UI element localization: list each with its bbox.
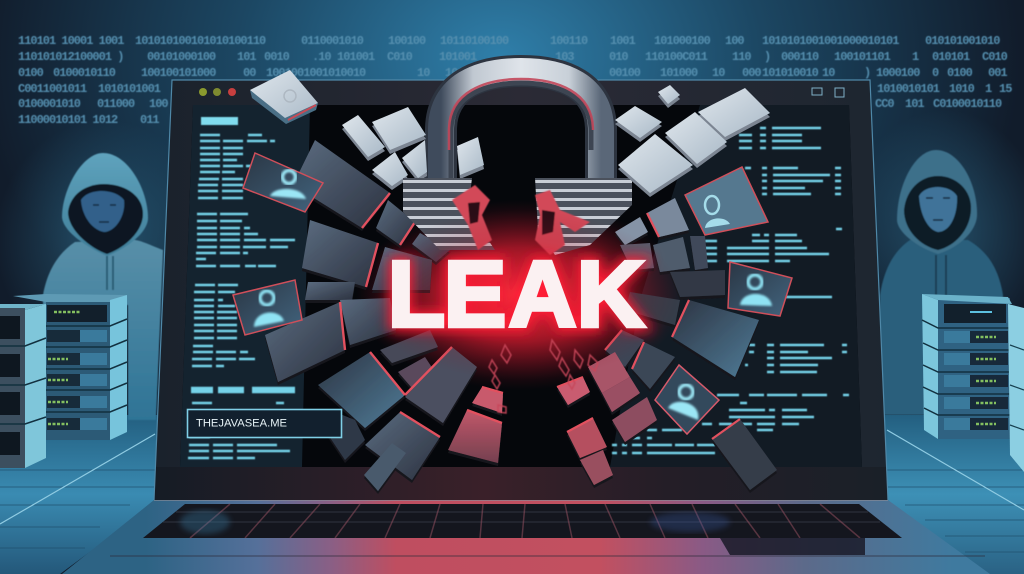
binary code wall: 100 (149, 97, 168, 111)
binary code wall: 101001 (439, 50, 477, 64)
binary code wall: 101 (445, 66, 464, 80)
binary code wall: 10 (417, 66, 430, 80)
fragments left (233, 70, 503, 491)
server rack right (922, 294, 1024, 472)
binary code wall: ) (764, 50, 770, 64)
binary code wall: ) (864, 66, 870, 80)
right code panel (610, 105, 862, 467)
binary code wall: 100 (725, 34, 744, 48)
binary code wall: 10 (822, 66, 835, 80)
binary code wall (18, 34, 1012, 127)
binary code wall: 00 (243, 66, 256, 80)
binary code wall: 101 (237, 50, 256, 64)
binary code wall: 101 (905, 97, 924, 111)
laptop (62, 80, 990, 574)
binary code wall: 100110 (550, 34, 588, 48)
red glow (355, 200, 685, 390)
binary code wall: 0100 (18, 66, 44, 80)
keyboard shadow reflection (720, 538, 865, 555)
keyboard (143, 504, 902, 538)
laptop bezel (154, 80, 888, 500)
leak title: LEAK (388, 242, 644, 346)
binary code wall: 1010101001001000010101 (762, 34, 899, 48)
binary code wall: 00100 (609, 66, 641, 80)
binary code wall: 1010101001 (98, 82, 161, 96)
binary code wall: 1010010101 (877, 82, 940, 96)
red overlay glow (360, 210, 680, 380)
code lines right (612, 128, 849, 453)
hooded figure left (43, 153, 163, 420)
red block edges right (557, 213, 740, 439)
binary code wall: 110101012100001 ) (18, 50, 123, 64)
binary code wall: 011000 (97, 97, 135, 111)
binary code wall: 1 (912, 50, 919, 64)
window dots (199, 88, 236, 96)
person card lower left (233, 280, 302, 335)
white tiles left (342, 107, 427, 186)
binary code wall: 0010 (264, 50, 290, 64)
binary code wall: 0100 (947, 66, 973, 80)
lock crack right (535, 190, 590, 255)
binary code wall: 101001 (337, 50, 375, 64)
leak glow: LEAK (388, 242, 644, 346)
binary code wall: 000110 (781, 50, 819, 64)
binary code wall: 0110001010 (301, 34, 364, 48)
url label: THEJAVASEA.ME (196, 418, 287, 430)
binary code wall: 101010010 (762, 66, 819, 80)
binary code wall: .10 (312, 50, 331, 64)
code lines left (188, 117, 295, 458)
binary code wall: 110100C011 (645, 50, 708, 64)
binary code wall: 1001 (610, 34, 636, 48)
binary code wall: 100100 (388, 34, 426, 48)
binary code wall: 011 (140, 113, 159, 127)
lock shackle (441, 71, 601, 185)
binary code wall: 103 (555, 50, 574, 64)
window controls (812, 88, 844, 97)
person card middle right (728, 262, 792, 316)
binary code wall: 101000 (660, 66, 698, 80)
fragments right (557, 85, 792, 490)
binary code wall: 1010 (949, 82, 975, 96)
binary code wall: 00101000100 (147, 50, 216, 64)
binary code wall: 001 (988, 66, 1007, 80)
binary code wall: 10110100100 (440, 34, 509, 48)
keyboard deck (62, 500, 990, 574)
binary code wall: 100101101 (834, 50, 891, 64)
server rack front left (0, 304, 46, 468)
tile behind shackle (457, 137, 484, 175)
server rack back left (13, 294, 127, 440)
dark blocks right (557, 198, 777, 490)
binary code wall: 010101001010 (925, 34, 1000, 48)
binary code wall: 1001001001010010 (266, 66, 366, 80)
url label (188, 410, 342, 438)
binary code wall: 000 (742, 66, 761, 80)
binary code wall: 0100010110 (53, 66, 116, 80)
screen (180, 105, 862, 467)
binary code wall: 0100001010 (18, 97, 81, 111)
binary code wall: C0100010110 (933, 97, 1002, 111)
binary code wall: CC0 (875, 97, 894, 111)
binary code wall: 101000100 (654, 34, 711, 48)
binary code wall: C010 (982, 50, 1008, 64)
floor (0, 415, 1024, 574)
binary code wall: 1 (985, 82, 992, 96)
binary code wall: 110 (732, 50, 751, 64)
lock crack left (452, 185, 492, 250)
binary code wall: 10 (712, 66, 725, 80)
red block edges left (340, 193, 503, 437)
white tiles right (615, 85, 770, 193)
binary code wall: 110101 10001 1001 (18, 34, 124, 48)
person card upper right (685, 167, 768, 235)
binary code wall: 1000100 (876, 66, 920, 80)
binary code wall: 15 (999, 82, 1012, 96)
dark blocks left (265, 140, 503, 491)
left code panel (180, 105, 310, 467)
lock body (403, 178, 632, 255)
binary code wall: C010 (387, 50, 413, 64)
binary code wall: 101010100101010100110 (135, 34, 266, 48)
binary code wall: 010101 (932, 50, 970, 64)
person card lower right (655, 365, 719, 434)
hooded figure right (880, 150, 1003, 415)
binary code wall: 11000010101 1012 (18, 113, 118, 127)
person card upper left (243, 153, 323, 212)
debris (489, 340, 598, 413)
binary code wall: 100100101000 (141, 66, 216, 80)
flying white card (250, 70, 318, 124)
binary code wall: 0 (932, 66, 939, 80)
binary code wall: C0011001011 (18, 82, 87, 96)
binary code wall: 010 (609, 50, 628, 64)
